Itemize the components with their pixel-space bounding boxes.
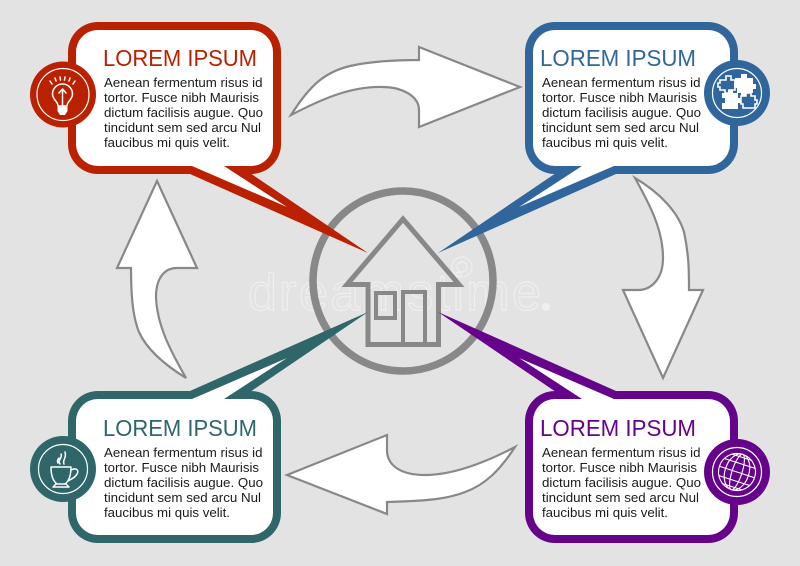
arrow: bottom, pointing left (287, 435, 515, 514)
text block: purple (542, 446, 701, 520)
panel: purple speech bubble (438, 312, 770, 543)
text block: purple: tortor. Fusce nibh Maurisis (542, 461, 697, 475)
heading: teal: LOREM IPSUM (103, 415, 257, 441)
text block: purple: dictum facilisis augue. Quo (542, 476, 701, 490)
text block: teal: tortor. Fusce nibh Maurisis (104, 461, 259, 475)
arrow: right, pointing down (623, 178, 703, 378)
text block: red (104, 76, 263, 150)
arrow: left, pointing up (117, 181, 197, 378)
watermark: dreamstime (248, 264, 541, 322)
icon: coffee cup (30, 436, 96, 502)
text block: blue: dictum facilisis augue. Quo (542, 106, 701, 120)
text block: blue (542, 76, 701, 150)
panel: red speech bubble (30, 22, 368, 253)
central home icon (313, 191, 493, 371)
panel: blue speech bubble (438, 22, 770, 253)
text block: teal: faucibus mi quis velit. (104, 506, 230, 520)
text block: red: tortor. Fusce nibh Maurisis (104, 91, 259, 105)
house window (376, 293, 395, 318)
text block: blue: tortor. Fusce nibh Maurisis (542, 91, 697, 105)
house outline (347, 219, 459, 344)
text block: blue: tincidunt sem sed arcu Nul (542, 121, 699, 135)
text block: blue: Aenean fermentum risus id (542, 76, 700, 90)
icon: puzzle (704, 60, 770, 126)
heading: blue: LOREM IPSUM (540, 45, 696, 71)
panel: teal speech bubble (30, 312, 368, 543)
text block: teal (104, 446, 263, 520)
text block: red: Aenean fermentum risus id (104, 76, 262, 90)
heading: purple: LOREM IPSUM (540, 415, 696, 441)
text block: teal: Aenean fermentum risus id (104, 446, 262, 460)
text block: purple: Aenean fermentum risus id (542, 446, 700, 460)
text block: red: faucibus mi quis velit. (104, 136, 230, 150)
text block: purple: tincidunt sem sed arcu Nul (542, 491, 699, 505)
heading: red: LOREM IPSUM (103, 45, 257, 71)
text block: teal: tincidunt sem sed arcu Nul (104, 491, 261, 505)
text block: red: tincidunt sem sed arcu Nul (104, 121, 261, 135)
icon: globe (704, 439, 770, 505)
house door (403, 292, 425, 344)
text block: teal: dictum facilisis augue. Quo (104, 476, 263, 490)
text block: red: dictum facilisis augue. Quo (104, 106, 263, 120)
icon: light bulb (30, 62, 96, 128)
text block: blue: faucibus mi quis velit. (542, 136, 668, 150)
text block: purple: faucibus mi quis velit. (542, 506, 668, 520)
central circle (313, 191, 493, 371)
arrow: top, pointing right (291, 47, 520, 127)
